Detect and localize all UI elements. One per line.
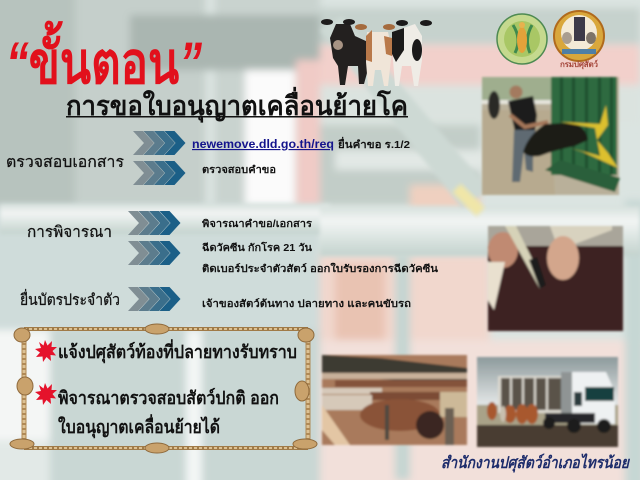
detail: พิจารณาคำขอ/เอกสาร (202, 218, 313, 230)
cow in head gate (523, 123, 588, 156)
notice line: ใบอนุญาตเคลื่อนย้ายได้ (58, 414, 220, 439)
icon: department of livestock emblem (554, 11, 604, 70)
link text: newemove.dld.go.th/req (192, 139, 334, 151)
panel: step 1 check documents (6, 131, 410, 185)
panel: step 3 ID card (20, 287, 411, 311)
notice line: พิจารณาตรวจสอบสัตว์ปกติ ออก (58, 387, 279, 408)
panel: rope frame notice (10, 324, 317, 453)
rope knots (10, 324, 317, 453)
rope frame (24, 329, 308, 448)
arrow (128, 287, 180, 311)
detail: ตรวจสอบคำขอ (202, 164, 276, 176)
photo: cattle truck (477, 357, 618, 447)
panel: step 2 consideration (27, 211, 438, 275)
subtitle: การขอใบอนุญาตเคลื่อนย้ายโค (66, 86, 408, 123)
emblem caption: กรมปศุสัตว์ (560, 59, 598, 70)
cow: black and white left (321, 19, 370, 85)
yellow head gate (560, 105, 618, 168)
arrow (128, 241, 180, 265)
icon: round green emblem (497, 14, 547, 64)
photo: feedlot with brown cattle (322, 355, 467, 445)
cow: black and white right (392, 20, 432, 86)
arrow (133, 131, 186, 155)
detail: ติดเบอร์ประจำตัวสัตว์ ออกใบรับรองการฉีดวัคซีน (202, 262, 438, 275)
arrow (128, 211, 180, 235)
icon: red star (35, 383, 57, 405)
arrow (133, 161, 186, 185)
title: “ขั้นตอน” (6, 21, 202, 96)
detail: ยื่นคำขอ ร.1/2 (338, 136, 410, 151)
step label: ยื่นบัตรประจำตัว (20, 289, 120, 309)
photo: hands vaccinating brown cow (488, 226, 623, 331)
icon: red star (35, 340, 57, 362)
cow: brown and white middle (355, 24, 395, 86)
notice line: แจ้งปศุสัตว์ท้องที่ปลายทางรับทราบ (58, 339, 297, 364)
step label: การพิจารณา (27, 224, 112, 241)
icon: three cows (321, 19, 432, 86)
farmer (508, 86, 548, 182)
step label: ตรวจสอบเอกสาร (6, 154, 124, 171)
photo: farmer handling cow in green chute (482, 77, 620, 195)
detail: เจ้าของสัตว์ต้นทาง ปลายทาง และคนขับรถ (202, 298, 411, 310)
detail: ฉีดวัคซีน กักโรค 21 วัน (202, 241, 312, 254)
